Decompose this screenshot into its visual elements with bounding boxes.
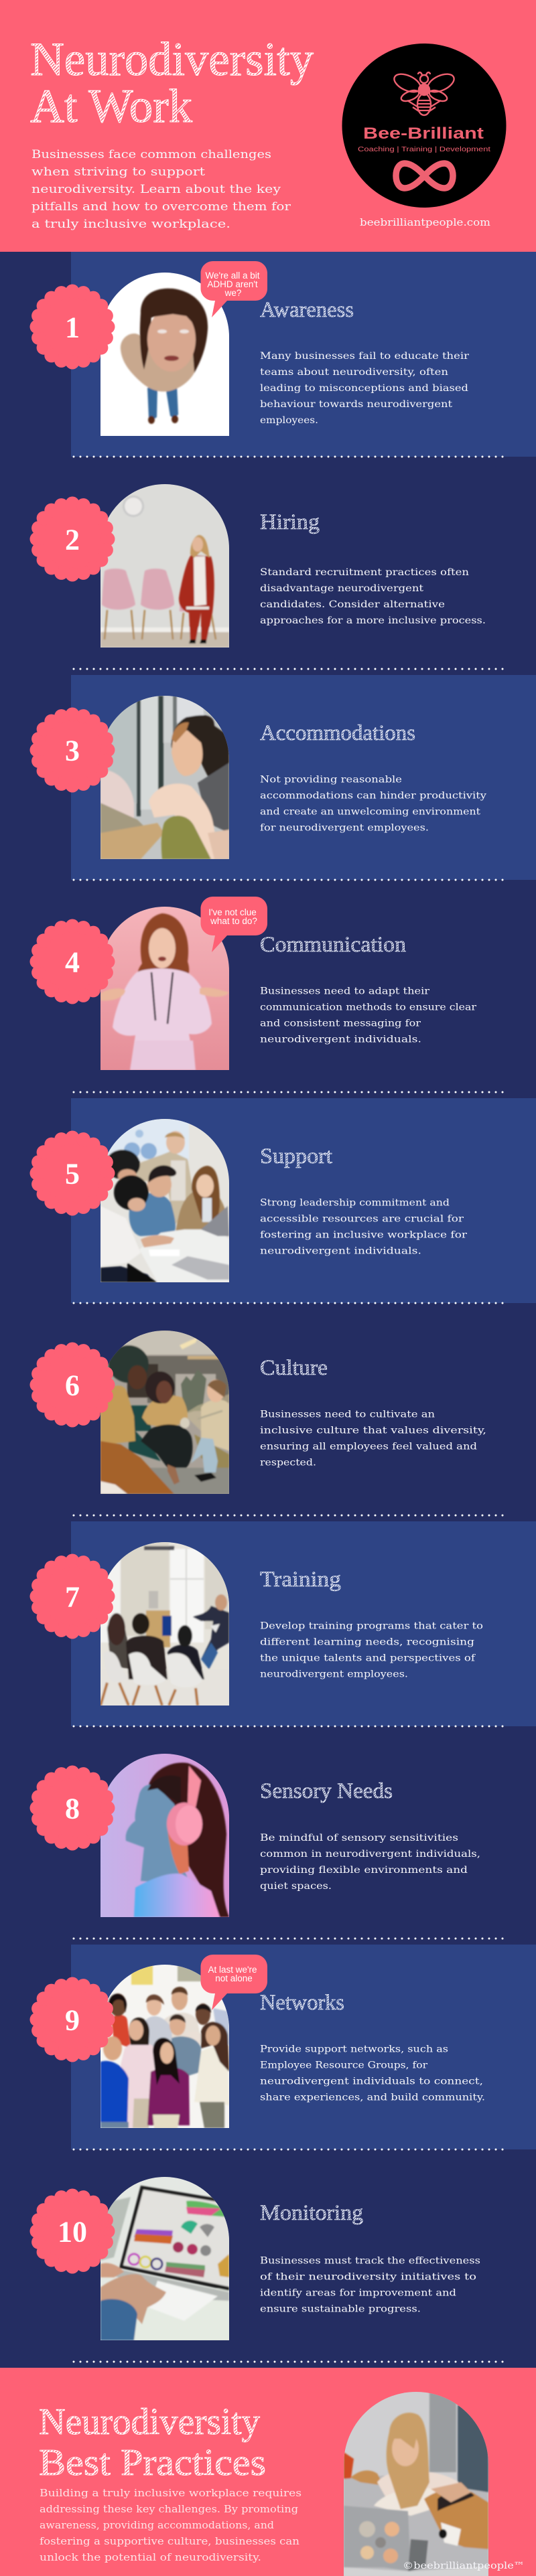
badge: 2 [29,497,115,581]
footer text [40,2487,302,2563]
badge: 6 [29,1342,115,1428]
heading: Communication [260,933,406,957]
text block: and create an unwelcoming environment [260,806,480,817]
photo: colleagues talking on sofa [100,1331,229,1494]
panel: 9 Networks [29,1945,536,2149]
text block: neurodivergent individuals. [260,1245,421,1256]
badge: 6: 6 [65,1369,80,1402]
badge: 3: 3 [65,734,80,767]
text block: Provide support networks, such as [260,2044,448,2054]
panel: 3 Accommodations [29,675,536,880]
heading: Culture [260,1356,328,1380]
photo: training session [100,1542,229,1706]
text block: the unique talents and perspectives of [260,1653,476,1663]
icon: bee [391,70,457,115]
badge: 5 [29,1130,115,1216]
callout: speech bubble: what to do? [210,916,257,926]
badge: 1: 1 [65,311,80,344]
panel: 6 Culture [29,1331,505,1515]
badge: 8 [29,1765,115,1851]
text block: ensuring all employees feel valued and [260,1441,477,1452]
footer text: unlock the potential of neurodiversity. [40,2551,261,2563]
panel: 10 Monitoring [29,2177,505,2362]
intro text: neurodiversity. Learn about the key [31,183,281,196]
text block: Businesses need to cultivate an [260,1409,435,1420]
title: Neurodiversity [30,33,314,86]
footer text: Building a truly inclusive workplace requires [40,2487,302,2499]
logo tagline: Coaching | Training | Development [358,145,490,153]
badge: 7 [29,1554,115,1639]
text block: respected. [260,1457,316,1468]
photo: laptop dashboard [100,2177,229,2340]
text block: candidates. Consider alternative [260,599,445,610]
text block: neurodivergent employees. [260,1669,408,1679]
text block: disadvantage neurodivergent [260,583,423,594]
photo: woman looking up [100,273,229,436]
text block [260,1833,480,1892]
callout: speech bubble [201,261,267,317]
text block [260,774,486,833]
callout: speech bubble: ADHD aren't [207,279,258,289]
website: beebrilliantpeople.com [360,218,490,228]
text block: behaviour towards neurodivergent [260,399,452,410]
callout: speech bubble: We're all a bit [205,271,260,281]
panel: 5 Support [29,1098,536,1303]
title [30,33,314,133]
heading: Networks [260,1991,344,2015]
badge: 5: 5 [65,1157,80,1191]
text block: approaches for a more inclusive process. [260,615,486,626]
photo: diverse group of colleagues [100,1965,229,2129]
panel: 8 Sensory Needs [29,1754,505,1939]
callout: speech bubble: not alone [215,1973,253,1983]
heading: Support [260,1144,332,1168]
text block [260,1409,486,1468]
photo: woman at window [100,696,229,859]
photo: woman in waiting room [100,484,229,648]
badge: 2: 2 [65,524,80,556]
text block: providing flexible environments and [260,1865,468,1876]
badge: 4: 4 [65,945,80,979]
logo name: Bee-Brilliant [363,125,484,143]
text block: leading to misconceptions and biased [260,383,468,394]
badge: 3 [29,707,115,793]
text block: Develop training programs that cater to [260,1620,483,1631]
heading: Training [260,1568,341,1592]
badge: 10: 10 [58,2215,87,2249]
badge: 9 [29,1977,115,2062]
text block: fostering an inclusive workplace for [260,1229,467,1240]
footer title [39,2401,266,2484]
photo: woman with dog and laptop [344,2392,488,2576]
badge: 7: 7 [65,1580,80,1614]
intro text: pitfalls and how to overcome them for [31,200,291,213]
copyright: ©beebrilliantpeople™ [403,2561,525,2571]
footer title: Neurodiversity [39,2401,260,2443]
text block [260,2044,485,2103]
text block: identify areas for improvement and [260,2287,456,2298]
panel: 4 Communication [29,897,505,1092]
text block [260,986,476,1045]
text block: accessible resources are crucial for [260,1213,464,1224]
text block [260,1620,483,1679]
badge: 9: 9 [65,2003,80,2037]
text block: ensure sustainable progress. [260,2303,421,2314]
text block: Strong leadership commitment and [260,1197,450,1208]
text block: inclusive culture that values diversity, [260,1425,486,1436]
text block: and consistent messaging for [260,1018,421,1029]
heading: Sensory Needs [260,1779,393,1803]
panel: header [0,0,536,252]
intro text: when striving to support [31,165,205,178]
text block: of their neurodiversity initiatives to [260,2271,476,2282]
intro text [31,148,291,230]
text block: different learning needs, recognising [260,1637,474,1647]
footer text: addressing these key challenges. By promoting [40,2503,298,2515]
text block: neurodivergent individuals. [260,1034,421,1045]
text block: accommodations can hinder productivity [260,790,486,801]
text block: Businesses must track the effectiveness [260,2255,480,2266]
panel: 2 Hiring [29,484,505,669]
heading: Accommodations [260,721,415,745]
callout: speech bubble: At last we're [208,1965,257,1975]
text block: Standard recruitment practices often [260,567,469,578]
photo: woman wearing headphones [100,1754,229,1917]
panel: 7 Training [29,1521,536,1726]
panel: footer best practices [0,2368,536,2576]
text block [260,567,486,626]
title: At Work [30,80,192,133]
text block: communication methods to ensure clear [260,1002,476,1012]
heading: Awareness [260,298,354,322]
text block: Employee Resource Groups, for [260,2060,427,2070]
callout: speech bubble: we? [224,288,241,298]
text block: teams about neurodiversity, often [260,367,448,378]
text block: employees. [260,415,318,426]
text block: Businesses need to adapt their [260,986,429,996]
text block: for neurodivergent employees. [260,822,429,833]
text block: common in neurodivergent individuals, [260,1849,480,1860]
text block [260,2255,480,2314]
intro text: a truly inclusive workplace. [31,218,230,230]
badge: 10 [29,2188,115,2274]
callout: speech bubble [201,897,267,952]
logo: Bee-Brilliant [342,44,507,208]
heading: Hiring [260,510,320,534]
photo: team around a table [100,1119,229,1282]
text block: share experiences, and build community. [260,2092,485,2103]
badge: 4 [29,919,115,1004]
text block: Be mindful of sensory sensitivities [260,1833,458,1843]
text block [260,1197,467,1256]
panel: 1 Awareness [29,252,536,457]
text block: quiet spaces. [260,1881,332,1892]
text block: Many businesses fail to educate their [260,351,469,362]
photo: confused woman in hoodie [100,907,229,1070]
text block: neurodivergent individuals to connect, [260,2076,483,2087]
callout: speech bubble: I've not clue [208,907,257,917]
callout: speech bubble [201,1955,267,2010]
footer text: fostering a supportive culture, businesses can [40,2535,299,2547]
icon: infinity [396,163,453,188]
text block [260,351,469,426]
footer text: awareness, providing accommodations, and [40,2519,274,2531]
footer title: Best Practices [39,2442,266,2484]
text block: Not providing reasonable [260,774,402,785]
badge: 8: 8 [65,1792,80,1825]
badge: 1 [29,284,115,370]
heading: Monitoring [260,2201,363,2225]
intro text: Businesses face common challenges [31,148,271,161]
